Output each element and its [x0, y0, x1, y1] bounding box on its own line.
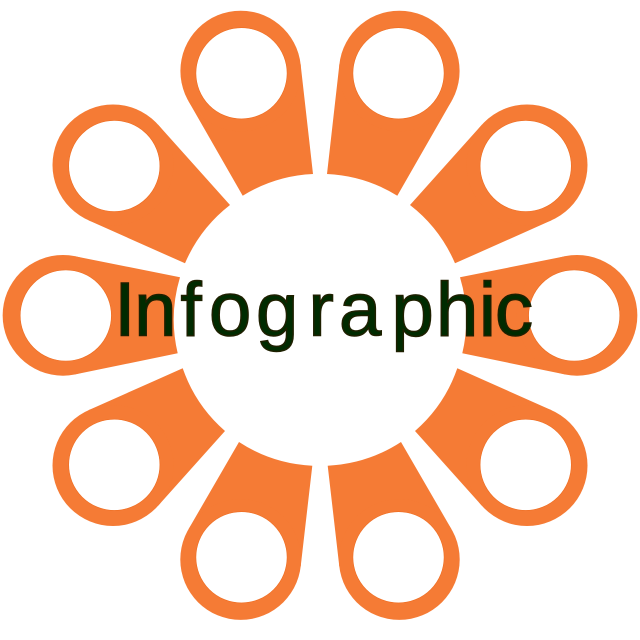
title: Infographic [114, 268, 533, 353]
petal: top right [327, 11, 460, 196]
petal: right [460, 255, 637, 376]
petal: bottom left [180, 442, 312, 620]
petal: upper right [410, 104, 588, 263]
petal: left [3, 255, 180, 376]
petal: lower right [415, 368, 588, 526]
petal: lower left [52, 368, 225, 526]
petal: bottom right [328, 442, 460, 620]
petal: top left [180, 11, 313, 196]
petal: upper left [52, 104, 230, 263]
